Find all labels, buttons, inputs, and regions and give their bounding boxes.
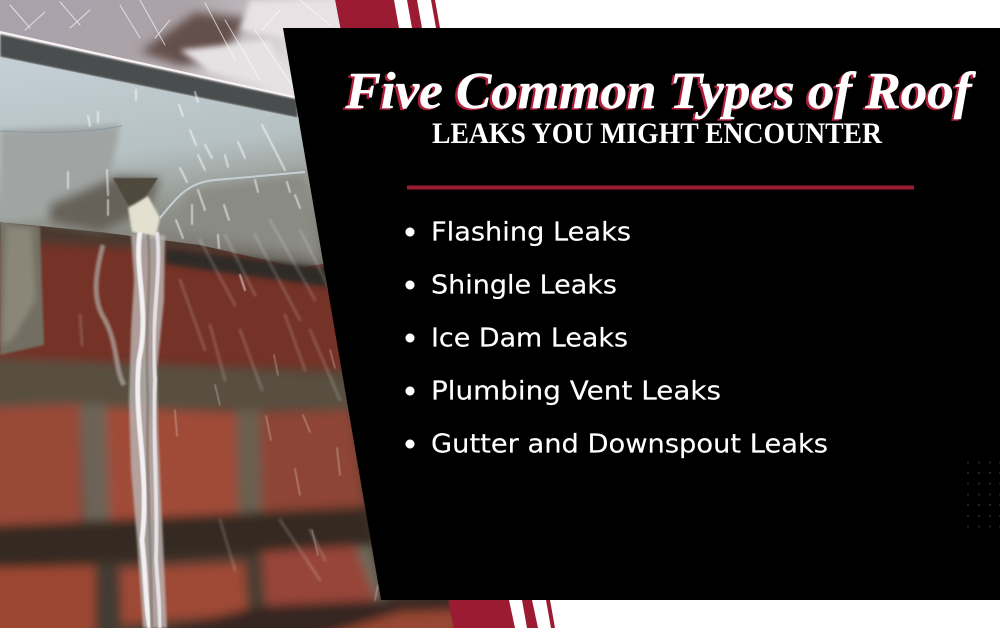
item: flashing leaks: Flashing Leaks: [431, 218, 631, 248]
item: gutter and downspout leaks: Gutter and Downspout Leaks: [431, 430, 828, 460]
decorative dot grid: [967, 462, 1000, 528]
gutter joint: [113, 178, 158, 205]
rain streaks: [10, 0, 378, 600]
title: Five Common Types of Roof: [342, 64, 974, 122]
roof surface with splash: [0, 0, 345, 97]
gutter seam: [160, 172, 305, 218]
gutter shadow band: [0, 34, 298, 118]
gutter body: [0, 57, 335, 268]
water stream: [96, 196, 167, 628]
photo: water pouring from a leaking gutter over a brick wall: [0, 0, 460, 628]
brick courses: [0, 240, 460, 628]
title: Five Common Types of Roof: [344, 63, 976, 120]
wall base: [0, 200, 460, 628]
subtitle: LEAKS YOU MIGHT ENCOUNTER: [432, 117, 882, 150]
mortar stub at top left: [0, 222, 44, 355]
item: ice dam leaks: Ice Dam Leaks: [431, 324, 628, 354]
bottom red stripes: [448, 600, 555, 628]
item: shingle leaks: Shingle Leaks: [431, 270, 617, 300]
item: plumbing vent leaks: Plumbing Vent Leaks: [431, 376, 721, 406]
black content panel: [283, 28, 1000, 600]
bright roof edge highlight: [0, 32, 294, 97]
bullet list: [406, 218, 828, 460]
red divider line: [407, 186, 914, 190]
top red stripes: [335, 0, 440, 28]
